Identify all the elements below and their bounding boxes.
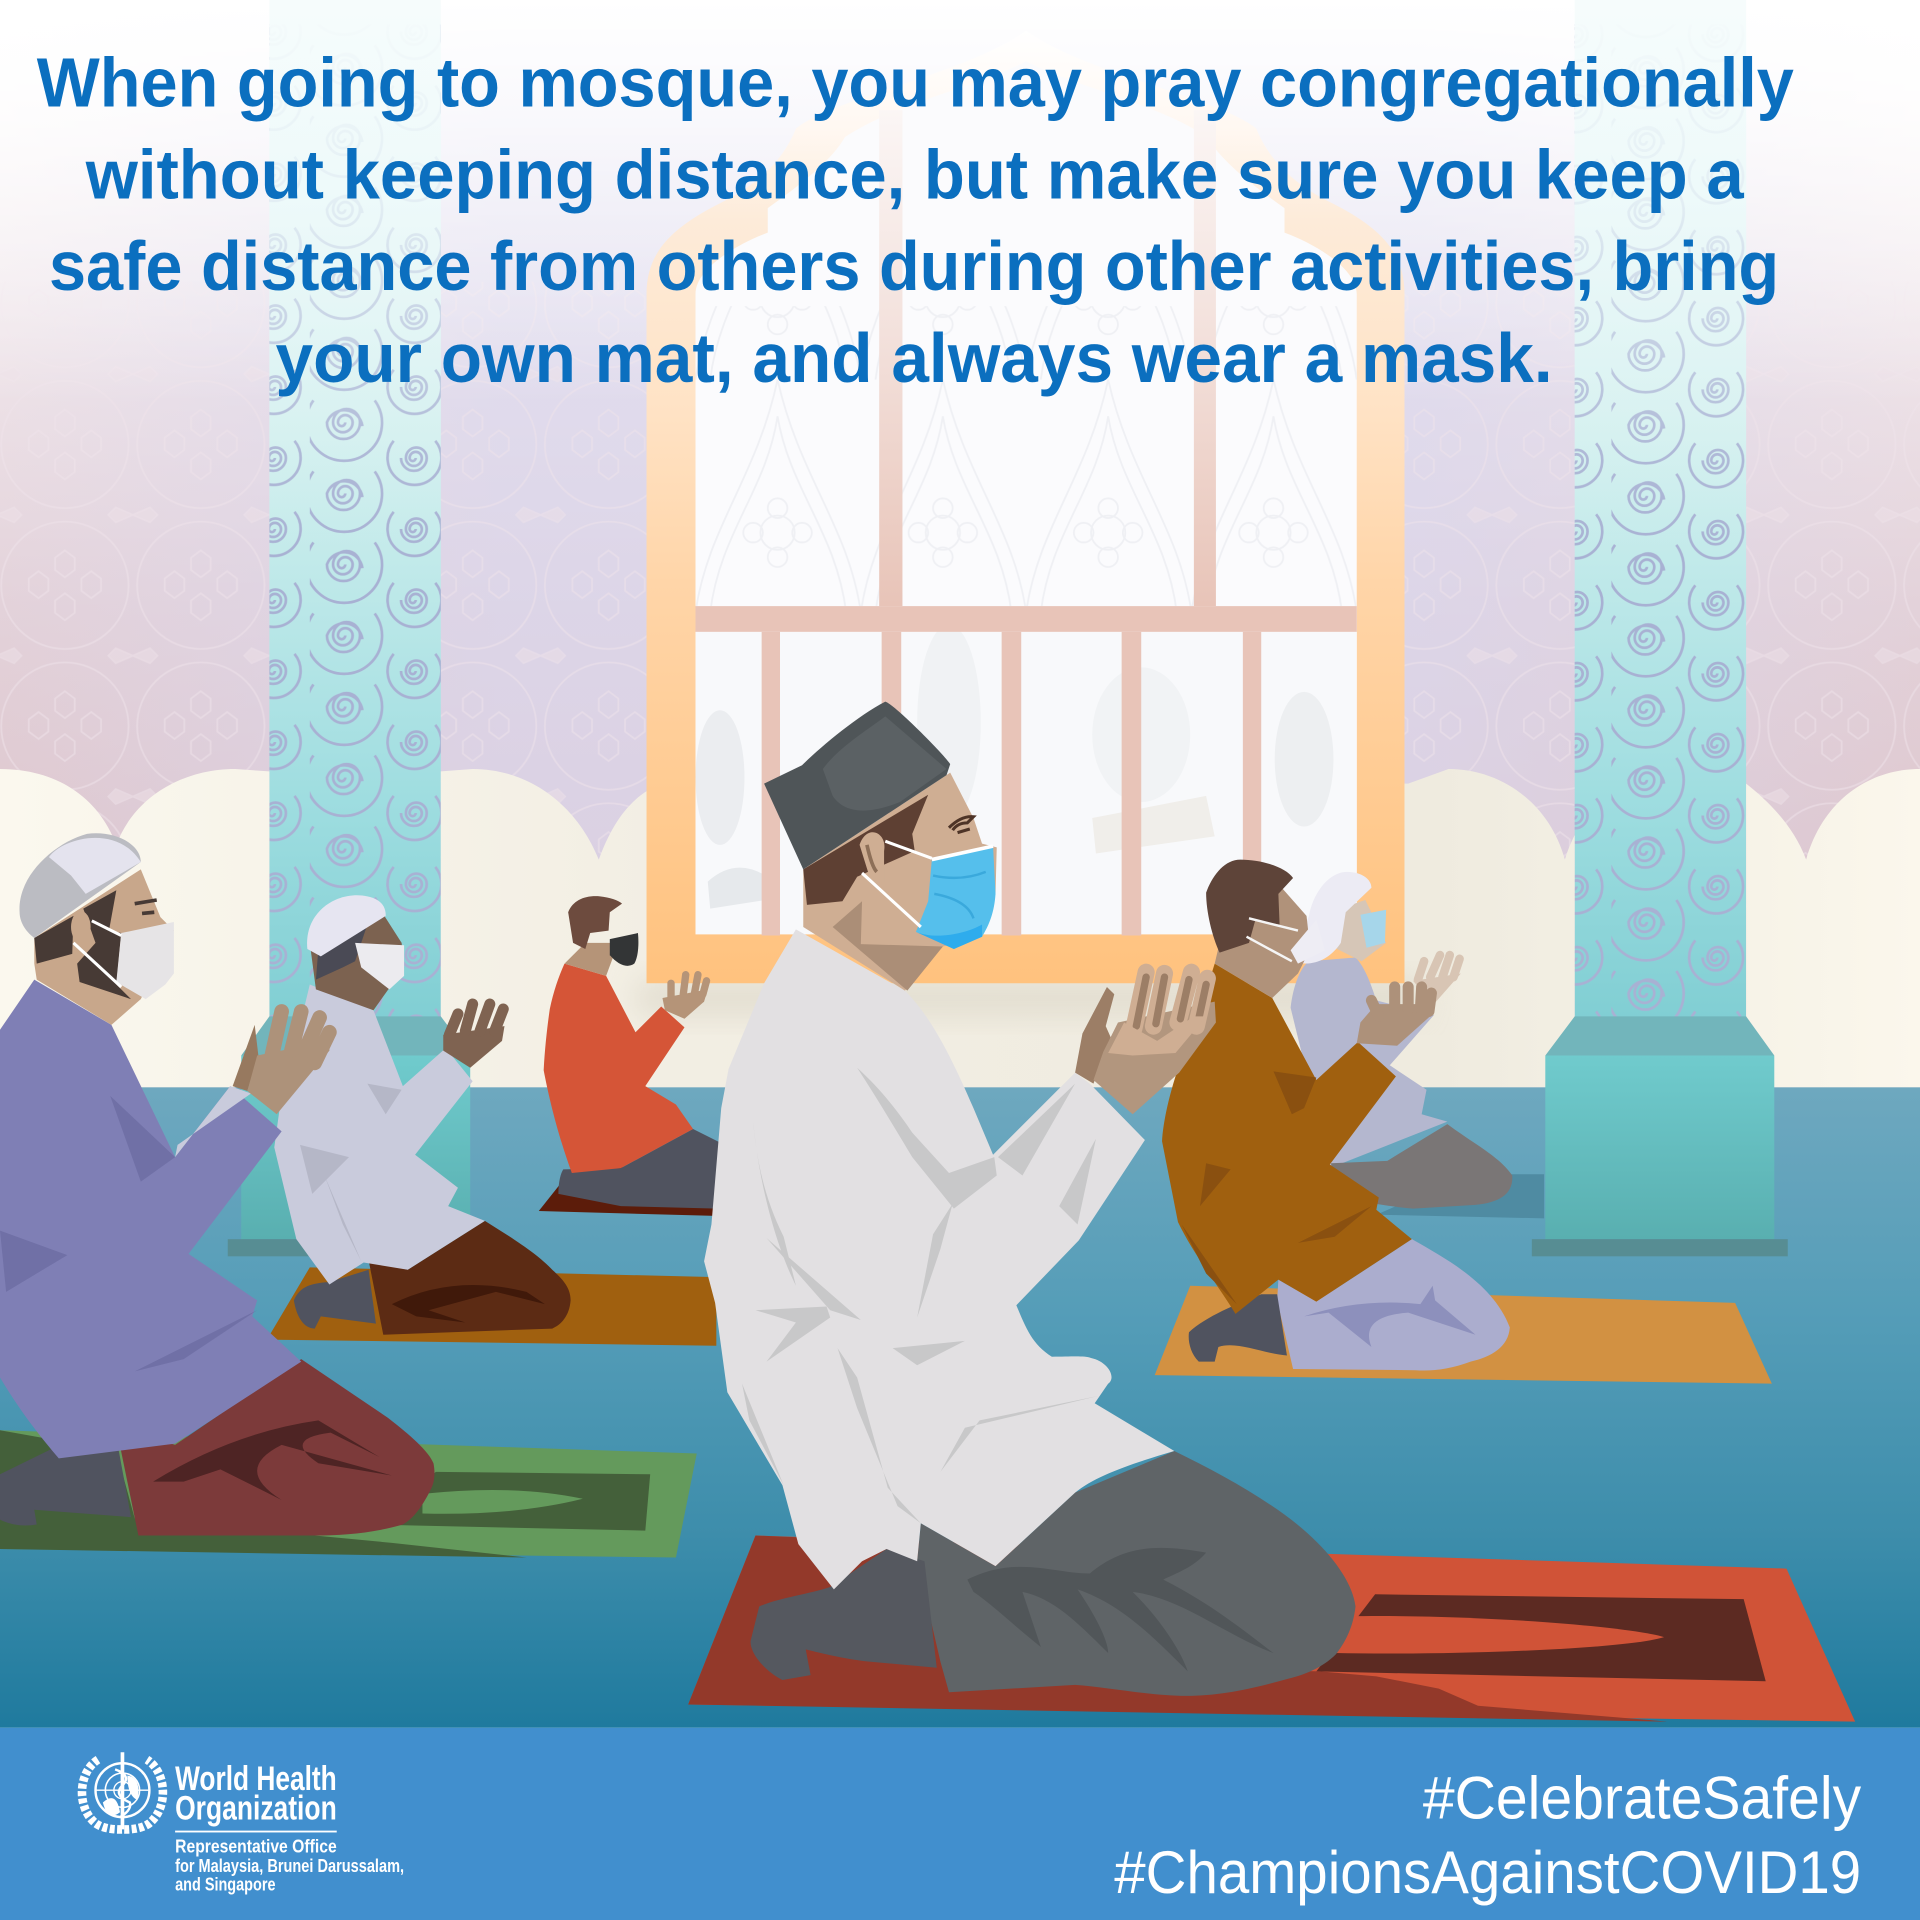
hand <box>1357 987 1434 1046</box>
window frame <box>647 31 1404 983</box>
neck and face <box>803 773 997 991</box>
decorative wall pattern <box>0 282 1920 918</box>
mat: green <box>0 1430 697 1558</box>
robe folds <box>722 1068 1098 1523</box>
worshipper: right, brown robe <box>1155 860 1772 1384</box>
title: safe distance from others during other activities, bring <box>49 227 1779 305</box>
hands <box>233 1011 329 1114</box>
right column base <box>1532 1016 1788 1256</box>
robe <box>704 929 1174 1589</box>
window <box>647 31 1404 983</box>
hashtags: #ChampionsAgainstCOVID19 <box>1114 1839 1861 1906</box>
foot <box>1189 1294 1287 1362</box>
eye <box>135 900 157 913</box>
garden view <box>696 624 1357 934</box>
worshipper: middle left, pale robe <box>267 895 716 1346</box>
neck and face <box>1215 885 1310 998</box>
lilac centre tint <box>0 0 1920 1102</box>
hashtags <box>1114 1764 1861 1906</box>
mat: orange <box>1155 1286 1772 1384</box>
floor <box>0 1087 1920 1728</box>
title: your own mat, and always wear a mask. <box>276 319 1553 397</box>
hair <box>34 916 73 964</box>
WHO wordmark: for Malaysia, Brunei Darussalam, <box>175 1855 404 1876</box>
window shadow on wall <box>637 980 1420 1016</box>
ear <box>860 832 885 884</box>
mat: amber <box>267 1267 716 1346</box>
robe <box>0 980 301 1458</box>
white mask <box>1291 920 1325 964</box>
window glass <box>696 61 1357 934</box>
scalloped lower wall <box>0 769 1920 1087</box>
worshipper: back, red robe <box>539 896 720 1216</box>
faded hand <box>1413 955 1461 1004</box>
worshipper: left, purple robe <box>0 833 697 1558</box>
trousers <box>116 1359 434 1536</box>
WHO wordmark: Organization <box>175 1790 337 1828</box>
back hand <box>1075 987 1114 1084</box>
cap <box>764 702 950 869</box>
mask <box>862 841 996 949</box>
hashtags: #CelebrateSafely <box>1423 1764 1861 1831</box>
mat: red <box>688 1536 1855 1722</box>
foot <box>751 1549 937 1680</box>
title: without keeping distance, but make sure you keep a <box>85 135 1745 213</box>
trousers <box>1277 1239 1510 1371</box>
left column base <box>228 1016 484 1256</box>
title: When going to mosque, you may pray congregationally <box>37 44 1794 122</box>
WHO wordmark: World Health <box>175 1760 337 1798</box>
WHO wordmark: and Singapore <box>175 1874 276 1895</box>
cap <box>19 833 141 938</box>
WHO emblem <box>82 1752 163 1829</box>
mask <box>73 921 174 999</box>
front hand <box>1093 972 1216 1114</box>
background wall <box>0 0 1920 1102</box>
worshipper: far right, faded <box>1291 872 1544 1218</box>
window bars <box>696 110 1357 936</box>
robe <box>1162 964 1412 1314</box>
neck and face <box>34 869 174 1025</box>
left column <box>269 0 441 1022</box>
eye <box>949 817 973 833</box>
footer band <box>0 1728 1920 1920</box>
window lattice pattern <box>696 306 1357 606</box>
foot <box>0 1438 131 1525</box>
worshipper: front centre, white robe <box>688 702 1855 1722</box>
hair <box>803 795 928 905</box>
beard <box>77 890 131 999</box>
WHO wordmark: Representative Office <box>175 1836 337 1857</box>
title <box>37 44 1794 397</box>
trousers <box>917 1451 1356 1696</box>
mat: dark red <box>539 1163 715 1216</box>
upper fade <box>0 0 1920 404</box>
right column <box>1575 0 1746 1022</box>
ear <box>71 911 91 943</box>
hair <box>1206 860 1293 953</box>
WHO wordmark <box>175 1760 404 1895</box>
